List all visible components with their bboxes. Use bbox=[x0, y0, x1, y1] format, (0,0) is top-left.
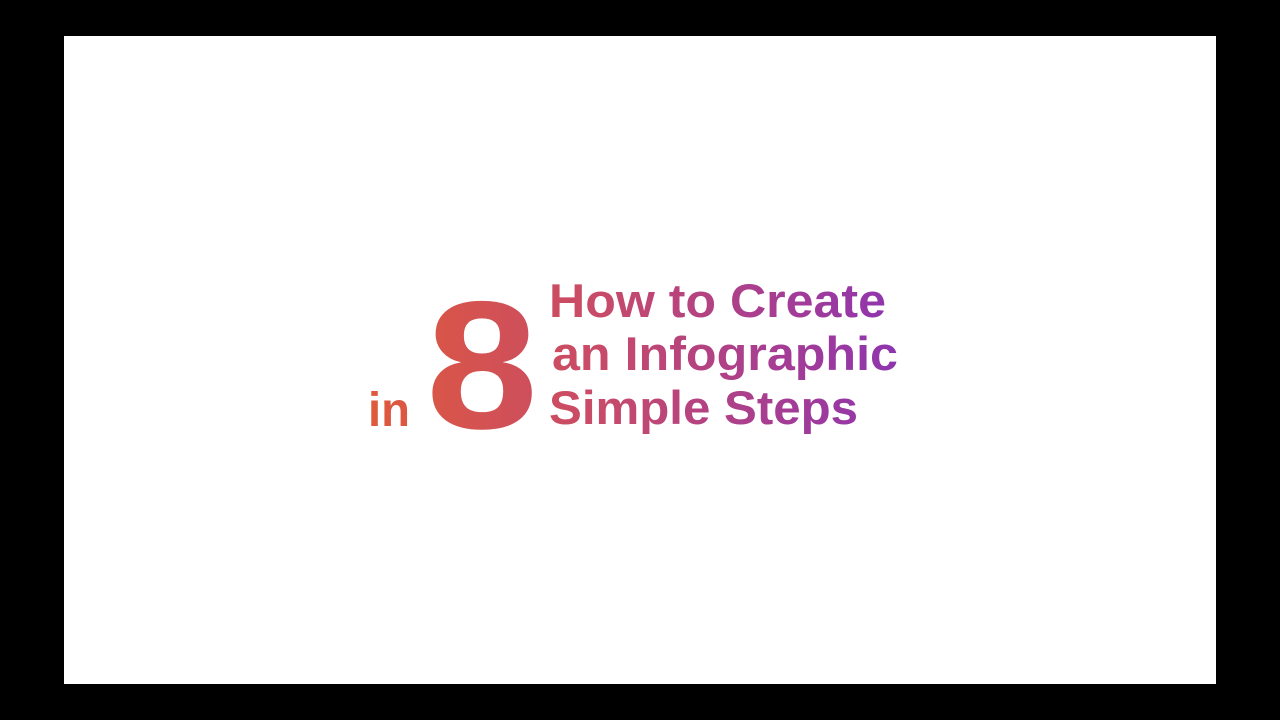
word: in: in bbox=[368, 384, 410, 437]
big number 8: 8 bbox=[426, 263, 538, 467]
line: Simple Steps: Simple Steps bbox=[549, 381, 858, 434]
line: How to Create: How to Create bbox=[549, 274, 886, 327]
line: an Infographic: an Infographic bbox=[552, 327, 898, 380]
title bbox=[368, 263, 898, 467]
